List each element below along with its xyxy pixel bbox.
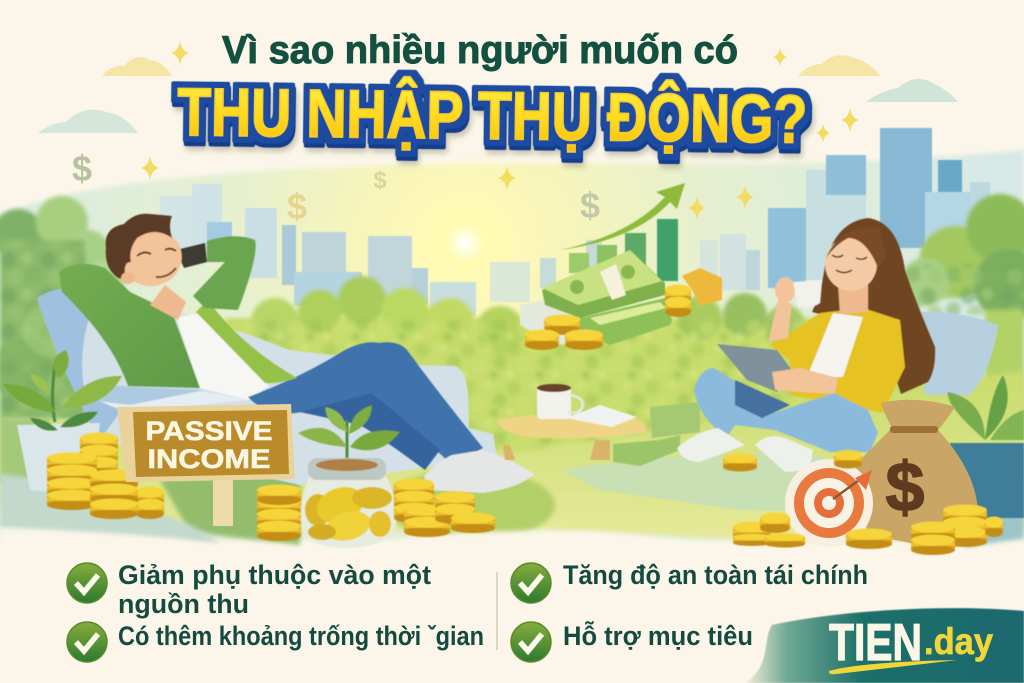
growth chart with arrow	[560, 183, 685, 281]
coffee cup	[793, 280, 822, 307]
floating dollars and sparkles: $	[72, 148, 92, 189]
hair	[106, 214, 172, 280]
right sofa	[920, 312, 998, 395]
woman	[677, 218, 935, 472]
sky	[0, 150, 1024, 540]
right teal strip	[955, 480, 1024, 547]
path bottom left	[0, 474, 220, 545]
stone platform	[562, 450, 860, 512]
title line 2: THU NHẬP THỤ ĐỘNG?	[177, 73, 808, 158]
left coin stacks	[47, 432, 164, 519]
benefit list	[67, 560, 868, 662]
right plant in pot	[948, 375, 1024, 518]
decorative clouds and sparkles at top	[38, 41, 958, 180]
lawn	[0, 370, 1024, 541]
benefit 1: Giảm phụ thuộc vào một	[118, 560, 431, 590]
green cash bricks by woman	[613, 402, 700, 466]
benefit 2	[67, 621, 484, 662]
coins around bag	[723, 450, 1003, 555]
lower arm and hand	[772, 368, 838, 394]
right trees	[901, 194, 1024, 440]
face and neck	[838, 285, 868, 314]
passive income sign	[117, 404, 295, 526]
sun	[375, 153, 555, 333]
cardigan	[770, 308, 905, 413]
jacket body and arms	[59, 264, 200, 388]
coffee table with cup and book	[497, 384, 646, 460]
right coin stacks near jar	[257, 478, 495, 537]
benefit 4: Hỗ trợ mục tiêu	[563, 621, 753, 651]
logo area	[745, 608, 1024, 683]
cash stacks and coins	[520, 250, 722, 350]
target with arrow	[785, 459, 873, 547]
floating dollars and sparkles	[72, 148, 754, 227]
closed eyes and smile	[137, 249, 176, 277]
left city skyline	[160, 184, 556, 316]
man	[59, 214, 534, 493]
money bag with dollar: $	[886, 448, 924, 526]
raised forearm	[768, 300, 792, 342]
passive income sign: INCOME	[148, 444, 270, 474]
cream foreground	[0, 528, 1024, 683]
long hair	[812, 218, 935, 394]
benefit 1	[67, 560, 431, 619]
money bag with dollar	[853, 400, 978, 545]
floating dollars and sparkles: $	[580, 185, 600, 226]
benefit 1: nguồn thu	[118, 589, 249, 619]
neck and face	[150, 285, 186, 320]
darker grass under sign	[160, 470, 300, 545]
passive income sign: PASSIVE	[146, 416, 272, 446]
sneakers	[677, 428, 745, 462]
logo area: .day	[924, 621, 993, 662]
title line 1: Vì sao nhiều người muốn có	[222, 29, 738, 72]
shoes	[424, 450, 534, 493]
right city skyline	[586, 128, 990, 290]
coin jar with sprout	[257, 405, 400, 548]
left potted plant	[3, 350, 122, 492]
tablet	[717, 344, 791, 392]
middle bushes	[225, 276, 925, 468]
benefit 3: Tăng độ an toàn tái chính	[563, 560, 868, 590]
jeans	[248, 342, 483, 465]
jeans	[694, 368, 878, 452]
grass behind right of jar	[385, 469, 555, 541]
floating dollars and sparkles: $	[373, 167, 387, 194]
white top	[807, 313, 863, 377]
benefit 2: Có thêm khoảng trống thời ˇgian	[118, 621, 484, 651]
floating dollars and sparkles: $	[287, 186, 307, 227]
benefit 3	[511, 560, 868, 603]
left trees	[0, 196, 125, 420]
white shirt	[176, 314, 269, 400]
man's lounge sofa	[37, 286, 497, 485]
logo area: TIEN	[829, 614, 922, 672]
benefit 4	[511, 621, 753, 662]
